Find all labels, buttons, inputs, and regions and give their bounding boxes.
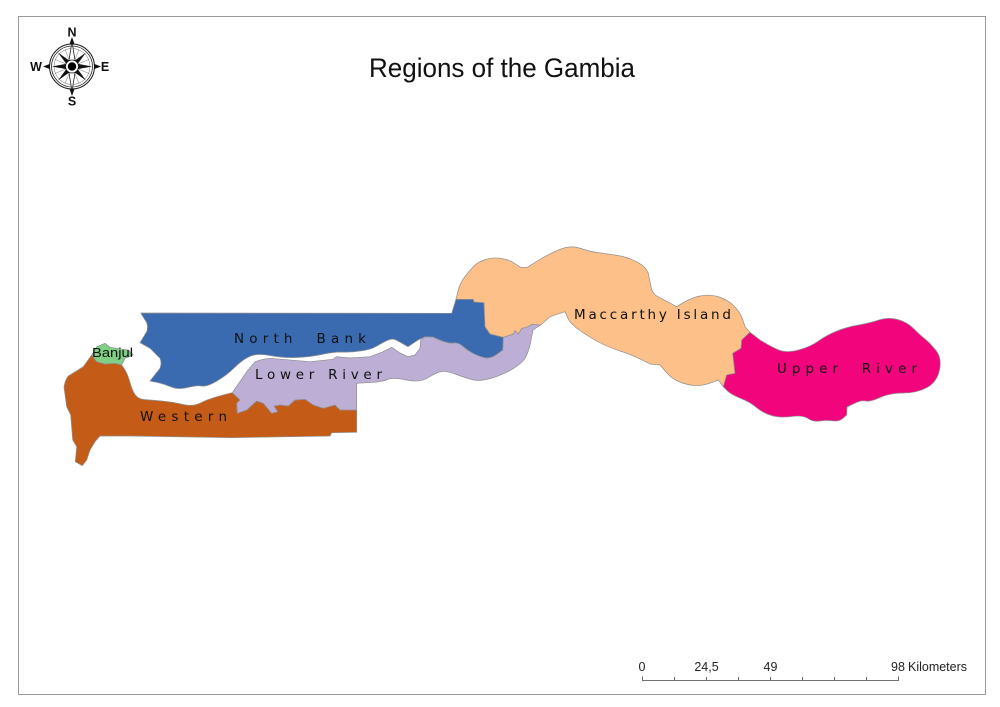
label: Upper River: Upper River [777, 361, 917, 377]
scale bar: 0 [639, 660, 646, 674]
region: North Bank [140, 299, 503, 389]
scale bar [639, 660, 967, 680]
region: Banjul [92, 343, 133, 365]
scale bar: 24,5 [694, 660, 719, 674]
label: Western: Western [140, 409, 227, 425]
scale bar: 98 [891, 660, 905, 674]
region: Western [64, 355, 357, 466]
region: Maccarthy Island [456, 247, 750, 387]
scale bar: Kilometers [908, 660, 967, 674]
icon: compass rose: E [101, 60, 109, 74]
region: Lower River [232, 324, 541, 413]
label: Maccarthy Island: Maccarthy Island [574, 307, 731, 323]
label: Banjul: Banjul [92, 345, 133, 360]
map of the regions [64, 247, 940, 466]
label: Lower River: Lower River [255, 367, 382, 383]
scale bar: 49 [764, 660, 777, 674]
region: Upper River [723, 318, 940, 421]
icon: compass rose: S [68, 94, 76, 108]
label: North Bank: North Bank [234, 331, 366, 347]
icon: compass rose: N [67, 26, 77, 40]
title: Regions of the Gambia [369, 53, 635, 83]
icon: compass rose [30, 26, 109, 108]
icon: compass rose: W [30, 60, 42, 74]
